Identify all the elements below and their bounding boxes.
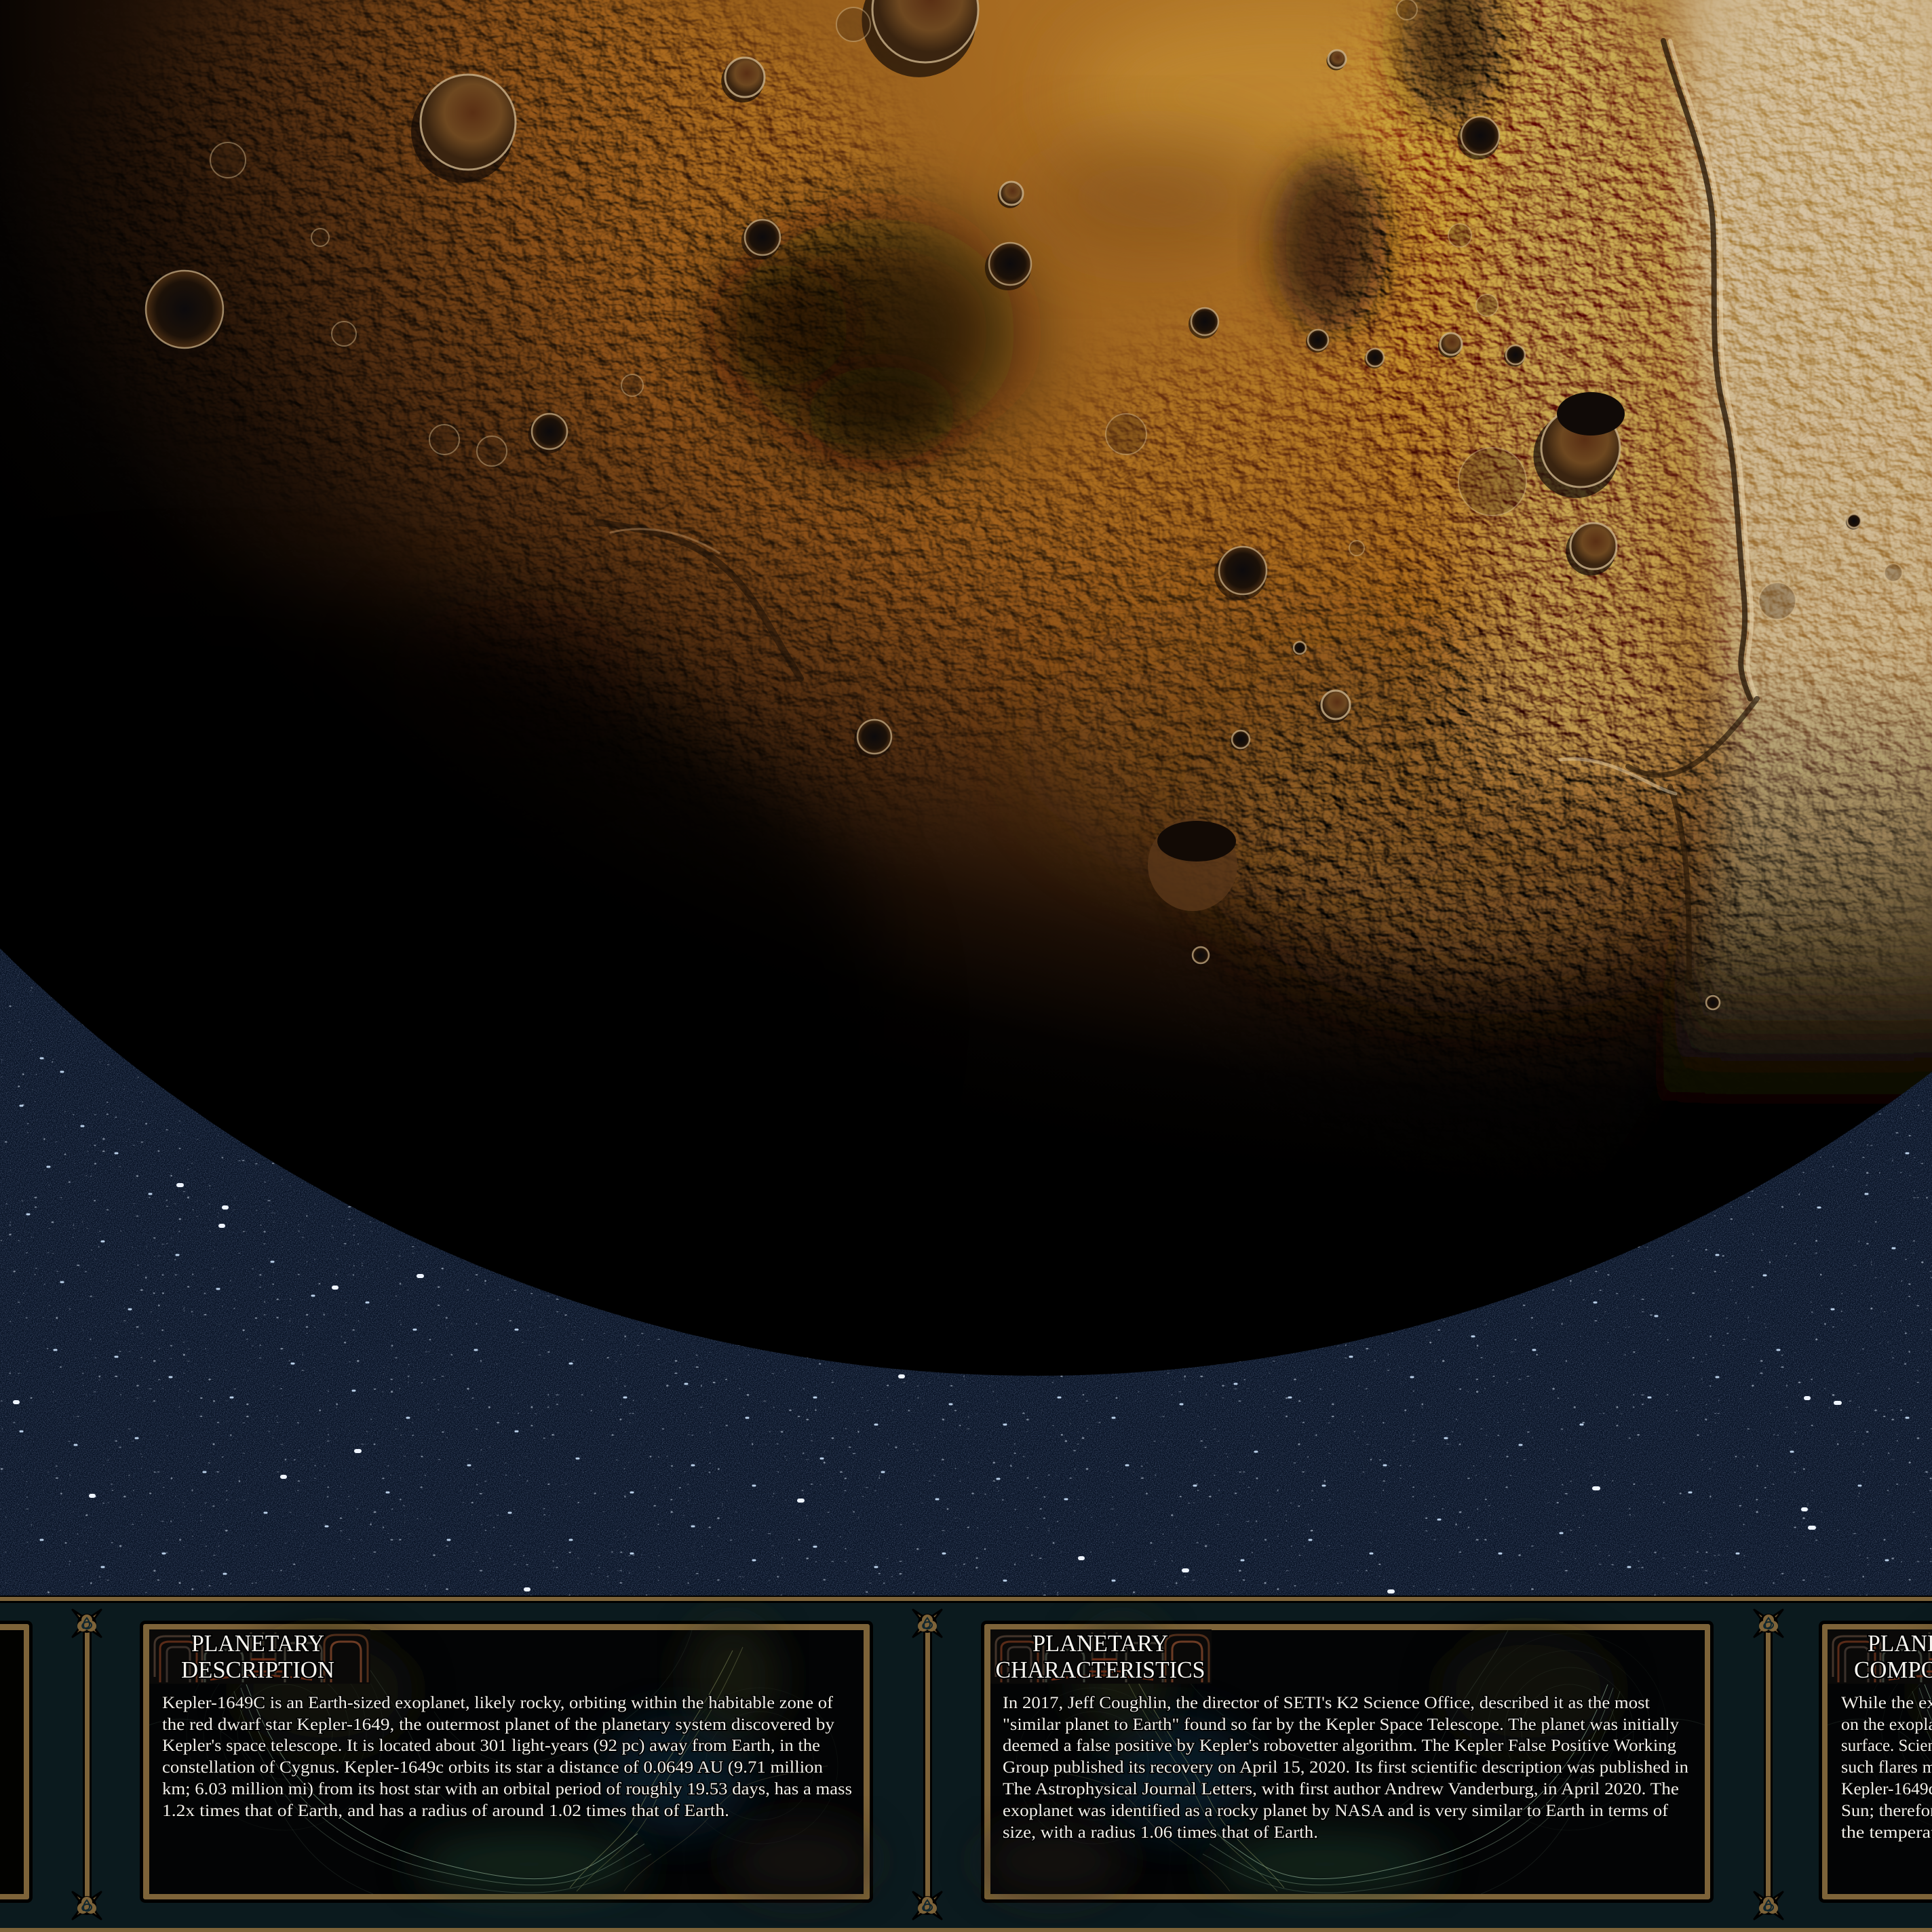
bottom information band [0, 1596, 1932, 1932]
body text: planetary characteristics: exoplanet was identified as a rocky planet by NASA and is very similar to Earth in terms of [1003, 1802, 1669, 1820]
heading: planetary characteristics: PLANETARY [1032, 1630, 1168, 1657]
heading backing pattern [990, 1629, 1212, 1684]
body text: planetary characteristics: In 2017, Jeff Coughlin, the director of SETI's K2 Science Office, described it as the most [1003, 1694, 1650, 1712]
panel: planetary composition (cropped at page edge) [1819, 1617, 1932, 1903]
panel: planetary characteristics [979, 1617, 1714, 1903]
body text: planetary characteristics: size, with a radius 1.06 times that of Earth. [1003, 1823, 1318, 1842]
body text: planetary composition: Kepler-1649c [1841, 1780, 1932, 1798]
body text: planetary composition [1841, 1694, 1932, 1842]
body text: planetary characteristics: "similar planet to Earth" found so far by the Kepler Space Telescope. The planet was initially [1003, 1716, 1680, 1734]
craters [138, 0, 1902, 1011]
heading: planetary characteristics: CHARACTERISTICS [996, 1657, 1205, 1683]
divider ornament 3 [1754, 1610, 1783, 1919]
body text: planetary description: the red dwarf star Kepler-1649, the outermost planet of the planetary system discovered by [162, 1716, 835, 1734]
planet [0, 0, 1932, 1438]
heading: planetary description [181, 1630, 334, 1683]
body text: planetary description: 1.2x times that of Earth, and has a radius of around 1.02 times that of Earth. [162, 1802, 729, 1820]
escarpment ridge [597, 41, 1757, 977]
body text: planetary characteristics: Group published its recovery on April 15, 2020. Its first scientific description was published in [1003, 1758, 1689, 1777]
body text: planetary characteristics [1003, 1694, 1689, 1842]
body text: planetary description [162, 1694, 852, 1820]
panel: left partial [0, 1621, 33, 1903]
body text: planetary composition: the temperat [1841, 1823, 1932, 1842]
panel: planetary description [140, 1617, 875, 1903]
heading backing pattern [149, 1629, 370, 1684]
body text: planetary description: constellation of Cygnus. Kepler-1649c orbits its star a distance of 0.0649 AU (9.71 million [162, 1758, 824, 1777]
body text: planetary composition: While the ex [1841, 1694, 1932, 1712]
terminator shadow [0, 597, 882, 1438]
planet lit surface colour [0, 0, 1932, 1087]
heading: planetary composition [1854, 1630, 1932, 1683]
heading: planetary description: PLANETARY [191, 1630, 324, 1657]
body text: planetary description: Kepler-1649C is an Earth-sized exoplanet, likely rocky, orbiting within the habitable zone of [162, 1694, 834, 1712]
body text: planetary description: km; 6.03 million mi) from its host star with an orbital period of roughly 19.53 days, has a mass [162, 1780, 852, 1798]
beige highland [1560, 0, 1932, 1221]
body text: planetary composition: on the exopla [1841, 1716, 1932, 1734]
heading: planetary characteristics [996, 1630, 1205, 1683]
heading backing pattern [1828, 1629, 1932, 1684]
body text: planetary characteristics: deemed a false positive by Kepler's robovetter algorithm. The Kepler False Positive Working [1003, 1737, 1677, 1755]
heading: planetary description: DESCRIPTION [181, 1657, 334, 1683]
divider ornament 1 [73, 1610, 101, 1919]
planet albedo patches [387, 0, 1764, 970]
surface relief texture [0, 0, 1932, 1425]
body text: planetary composition: such flares m [1841, 1758, 1932, 1777]
body text: planetary composition: Sun; therefor [1841, 1802, 1932, 1820]
body text: planetary characteristics: The Astrophysical Journal Letters, with first author Andrew Vanderburg, in April 2020. The [1003, 1780, 1679, 1798]
body text: planetary description: Kepler's space telescope. It is located about 301 light-years (92 pc) away from Earth, in the [162, 1737, 820, 1755]
divider ornament 2 [913, 1610, 942, 1919]
